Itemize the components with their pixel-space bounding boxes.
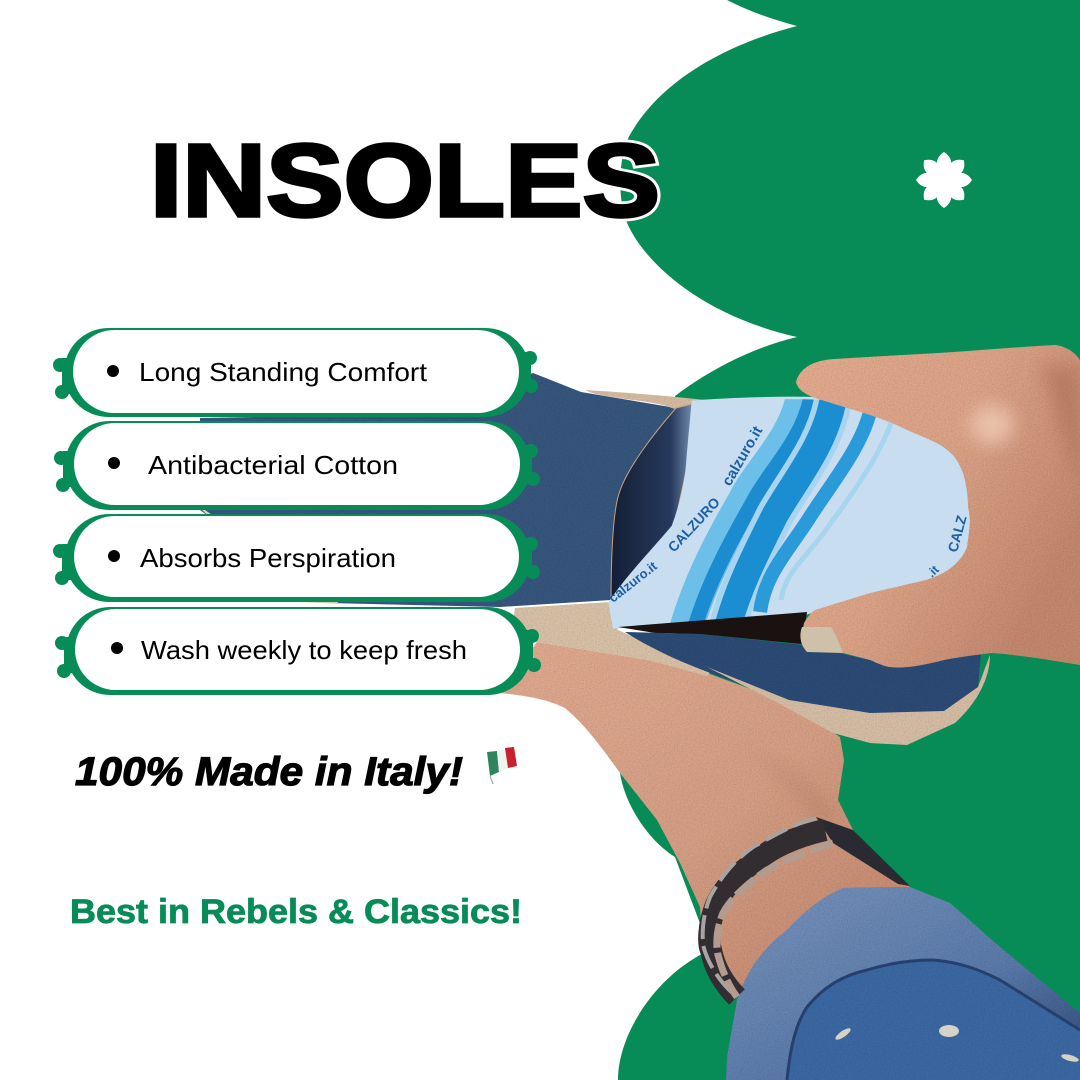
shoe front denim — [625, 632, 981, 716]
lower hand and wrist — [500, 642, 910, 997]
shoe beige collar — [585, 390, 706, 410]
shoe beige lining left strip — [200, 508, 340, 604]
flower icon — [916, 152, 972, 208]
insole logo: .it — [924, 563, 942, 580]
pill: antibacterial cotton: Antibacterial Cotton — [148, 450, 398, 480]
wrist crease shading — [740, 745, 838, 825]
photo: hands holding shoe with insole — [200, 345, 1080, 1080]
upper hand — [796, 345, 1080, 668]
sleeve inner fold — [787, 960, 1080, 1080]
title: INSOLES — [150, 123, 660, 238]
thumb nail — [800, 627, 843, 653]
feature pills — [53, 328, 541, 695]
shoe interior shadow — [611, 403, 696, 628]
insole — [606, 396, 970, 630]
shoe denim upper — [200, 373, 676, 607]
title: INSOLES — [150, 123, 660, 238]
pill: long standing comfort — [53, 328, 538, 417]
insole logo — [606, 423, 970, 605]
shoe sole — [707, 655, 990, 745]
insole logo: calzuro.it — [719, 423, 766, 489]
black gap under insole — [618, 612, 807, 644]
sleeve fold edge — [787, 960, 1080, 1080]
knuckle highlight — [970, 405, 1014, 445]
icon: italian flag — [487, 747, 517, 784]
bracelet — [703, 817, 910, 997]
green background shape — [618, 0, 1080, 1080]
insole logo: CALZURO — [664, 494, 723, 555]
pill: wash weekly — [55, 607, 541, 695]
made in italy text: 100% Made in Italy! — [75, 750, 463, 794]
insole stripes — [686, 396, 892, 630]
shirt dots — [834, 1025, 1079, 1063]
pill: antibacterial cotton — [54, 421, 540, 510]
shoe beige lining — [510, 602, 712, 676]
best in rebels and classics text: Best in Rebels & Classics! — [70, 893, 522, 931]
pill: absorbs perspiration: Absorbs Perspiration — [140, 543, 396, 573]
shirt sleeve — [726, 887, 1080, 1080]
pill: absorbs perspiration — [53, 514, 540, 602]
pill: wash weekly: Wash weekly to keep fresh — [141, 635, 467, 665]
pill: long standing comfort: Long Standing Comfort — [139, 357, 428, 387]
insole logo: calzuro.it — [606, 558, 660, 605]
hand shading — [1040, 365, 1080, 480]
insole logo: CALZ — [944, 513, 970, 554]
